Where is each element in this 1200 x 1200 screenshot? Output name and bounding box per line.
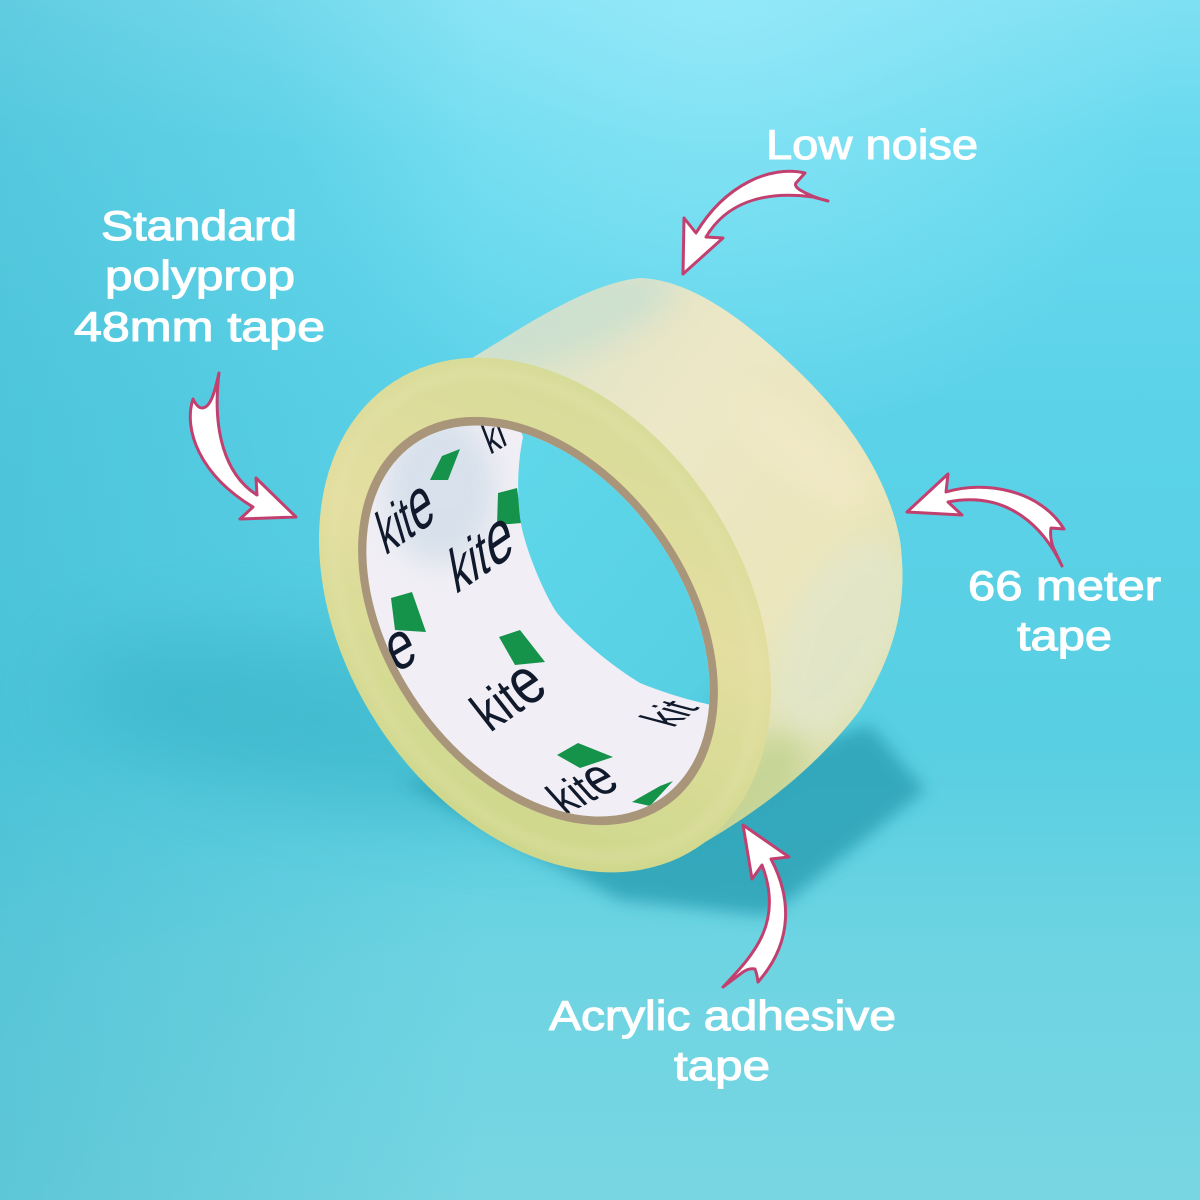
logo: kite repeat 3: e xyxy=(374,603,425,688)
logo: kite repeat 5: kit xyxy=(628,696,712,731)
logo: kite repeat 1 xyxy=(374,449,460,554)
label: low noise: Low noise xyxy=(766,121,978,168)
cast shadow under tape xyxy=(51,599,925,916)
label: 66 meter tape xyxy=(968,562,1161,659)
label: standard polyprop 48mm tape: Standard xyxy=(101,202,297,249)
logo: kite repeat 3 xyxy=(388,592,426,669)
logo: kite repeat 7 xyxy=(476,409,673,806)
label: 66 meter tape: tape xyxy=(1017,612,1112,659)
arrow: low noise xyxy=(683,171,828,274)
arrow: acrylic adhesive xyxy=(723,825,789,987)
cardboard core xyxy=(284,349,792,893)
tape roll xyxy=(319,278,902,872)
logo: kite repeat 4: kite xyxy=(452,644,559,744)
label: 66 meter tape: 66 meter xyxy=(968,562,1161,609)
label: acrylic adhesive tape xyxy=(549,992,896,1089)
logo: kite repeat 2: kite xyxy=(442,487,518,611)
inner core printed liner xyxy=(366,426,710,816)
logo: kite repeat 4 xyxy=(468,630,545,732)
logo: kite repeat 6 xyxy=(544,743,616,813)
tape outer side surface xyxy=(460,278,902,845)
logo: kite repeat 6: kite xyxy=(530,748,631,825)
tape front rim xyxy=(226,273,864,957)
see-through centre hole xyxy=(518,432,710,704)
arrow: standard polyprop xyxy=(190,373,296,519)
label: standard polyprop 48mm tape: 48mm tape xyxy=(74,303,325,350)
logo: kite repeat 1: kite xyxy=(366,457,442,571)
tape side highlights xyxy=(455,250,936,887)
label: acrylic adhesive tape: tape xyxy=(674,1042,770,1089)
label: standard polyprop 48mm tape xyxy=(74,202,325,350)
label: standard polyprop 48mm tape: polyprop xyxy=(105,252,295,299)
label: acrylic adhesive tape: Acrylic adhesive xyxy=(549,992,896,1039)
arrow: 66 meter xyxy=(907,474,1064,566)
logo: kite repeat 7: ki xyxy=(476,409,512,464)
